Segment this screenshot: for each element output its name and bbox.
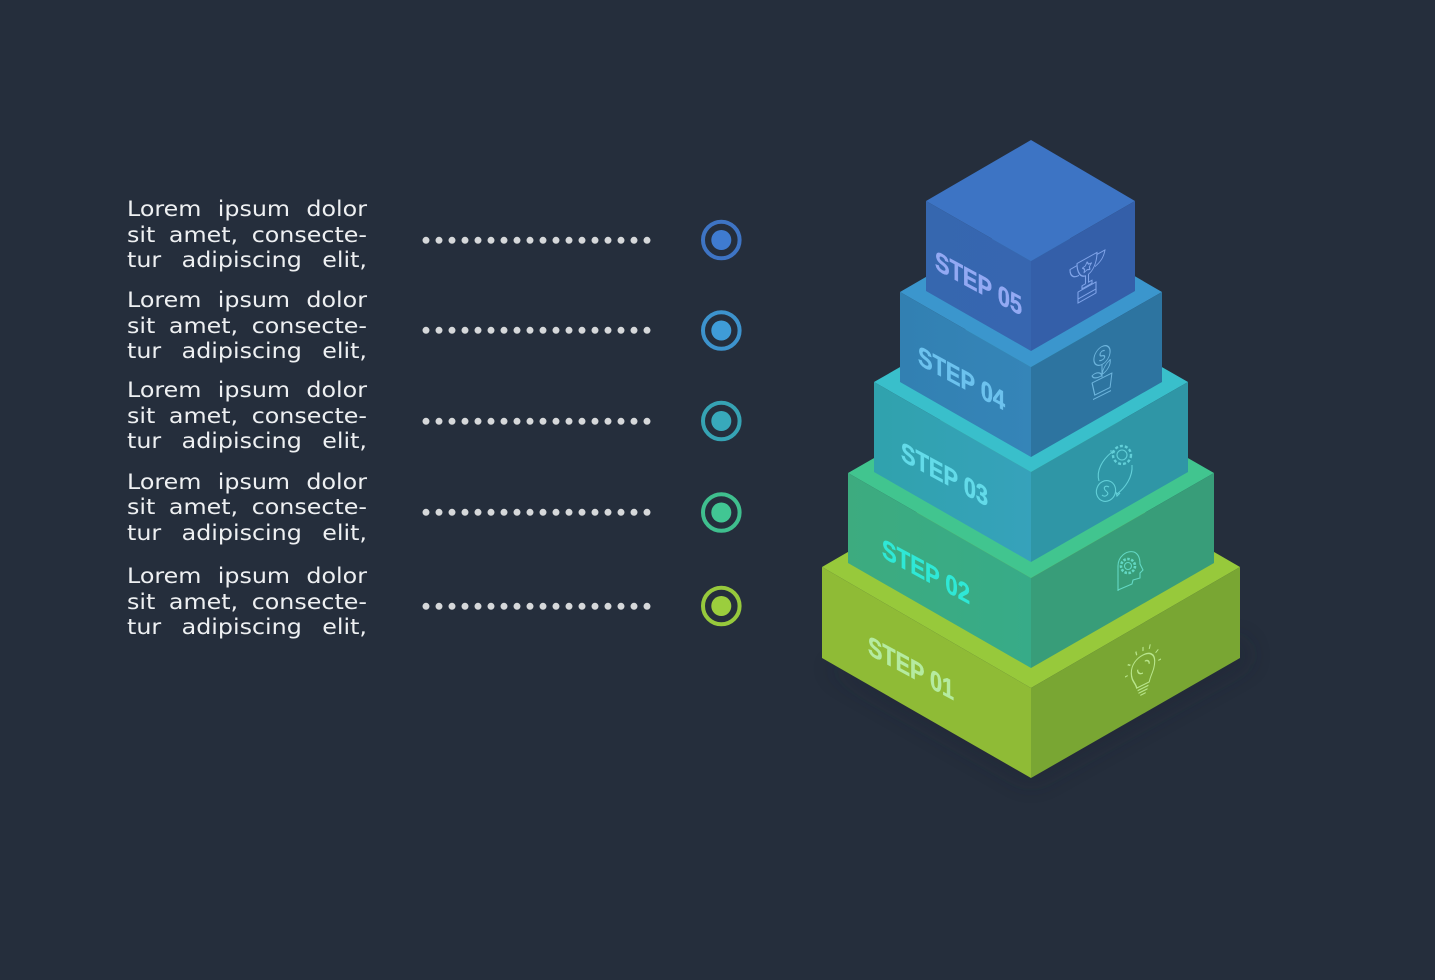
text block 3: Lorem ipsum dolor xyxy=(127,378,367,402)
dotted connector 4 xyxy=(426,327,647,334)
text block 3: sit amet, consecte- xyxy=(127,404,367,428)
ground shadow xyxy=(826,640,1250,782)
icon: head with gear xyxy=(1118,552,1143,591)
label: step 01: STEP 01 xyxy=(868,631,954,707)
marker 4 xyxy=(703,312,740,349)
text block 5: tur adipiscing elit, xyxy=(127,248,367,272)
marker 3 xyxy=(703,403,740,439)
text block 2 xyxy=(127,470,368,544)
dotted connector 2 xyxy=(426,509,647,516)
icon: trophy xyxy=(1070,248,1105,308)
text block 3 xyxy=(127,378,368,453)
text block 4: Lorem ipsum dolor xyxy=(127,288,367,312)
label: step 04: STEP 04 xyxy=(918,341,1005,418)
label: step 02: STEP 02 xyxy=(882,534,970,611)
text block 1 xyxy=(127,564,368,639)
marker 1 xyxy=(703,588,740,624)
text block 4: sit amet, consecte- xyxy=(127,314,367,338)
label: step 03: STEP 03 xyxy=(901,437,988,514)
dotted connector 3 xyxy=(426,418,647,425)
text block 1: tur adipiscing elit, xyxy=(127,615,367,639)
text block 5 xyxy=(127,197,368,272)
text block 5: sit amet, consecte- xyxy=(127,222,367,246)
icon: money plant xyxy=(1092,342,1112,400)
text block 1: Lorem ipsum dolor xyxy=(127,564,367,588)
marker 5 xyxy=(703,222,740,258)
step 05 block xyxy=(926,140,1135,351)
step 04 block xyxy=(900,216,1162,457)
text block 2: tur adipiscing elit, xyxy=(127,520,367,544)
dotted connector 5 xyxy=(426,237,647,244)
step 02 block xyxy=(848,368,1214,668)
text block 3: tur adipiscing elit, xyxy=(127,429,367,453)
text block 5: Lorem ipsum dolor xyxy=(127,197,367,221)
icon: gear and coin cycle xyxy=(1093,446,1132,504)
label: step 05: STEP 05 xyxy=(935,246,1022,323)
text block 1: sit amet, consecte- xyxy=(127,590,367,614)
step 03 block xyxy=(874,292,1188,562)
icon: light bulb xyxy=(1125,638,1161,703)
text block 4 xyxy=(127,288,368,363)
dotted connector 1 xyxy=(426,603,647,610)
text block 2: Lorem ipsum dolor xyxy=(127,470,367,494)
marker 2 xyxy=(703,494,740,531)
text block 4: tur adipiscing elit, xyxy=(127,339,367,363)
text block 2: sit amet, consecte- xyxy=(127,495,367,519)
step 01 block xyxy=(822,446,1240,778)
